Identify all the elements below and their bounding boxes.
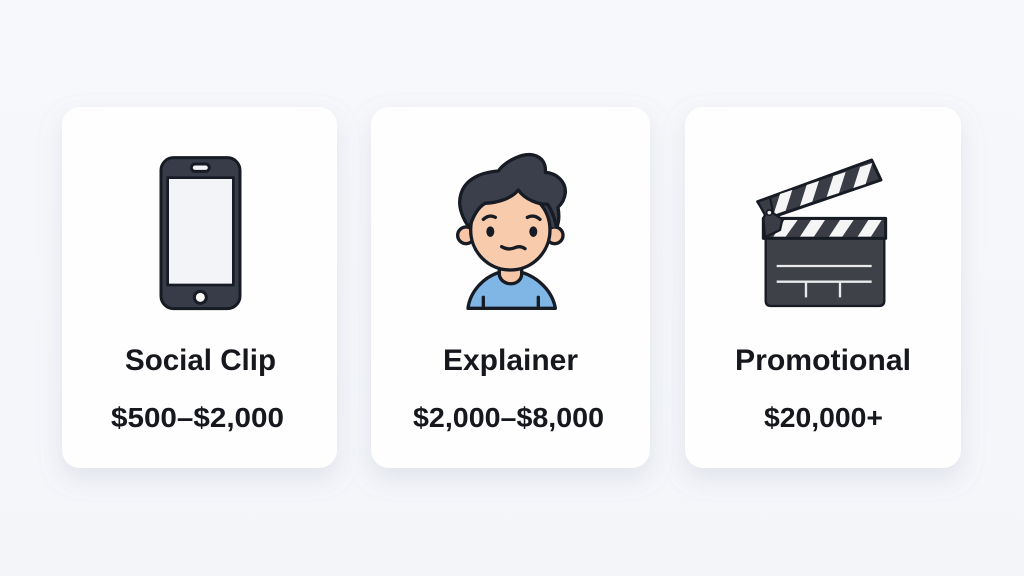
panel: promotional card [685,107,961,468]
title: Promotional: Promotional [735,344,911,377]
card background [371,107,650,468]
title: Social Clip: Social Clip [125,344,276,377]
panel: explainer card [371,107,650,468]
panel: social clip card [62,107,337,468]
icon: film clapperboard [758,160,886,306]
price: $2,000–$8,000: $2,000–$8,000 [413,402,604,433]
price: $500–$2,000: $500–$2,000 [111,402,284,433]
card background [685,107,961,468]
icon: smartphone [161,158,240,309]
title: Explainer: Explainer [443,344,578,377]
price: $20,000+: $20,000+ [764,402,883,433]
card background [62,107,337,468]
icon: cartoon person [458,155,565,308]
